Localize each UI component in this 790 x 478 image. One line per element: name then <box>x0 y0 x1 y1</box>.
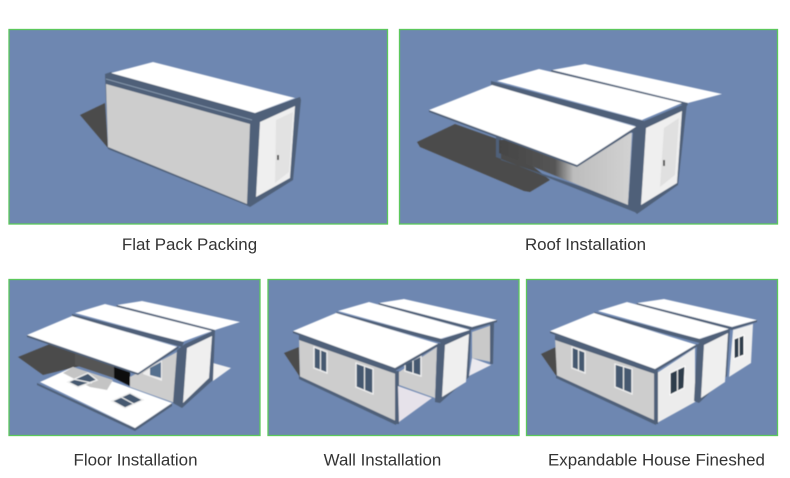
illustration: finished house <box>541 299 757 425</box>
illustration: folded container <box>80 62 301 207</box>
illustration: walls added <box>284 299 497 425</box>
caption: roof installation: Roof Installation <box>525 235 646 254</box>
panel background <box>268 280 519 436</box>
caption: expandable house finished: Expandable House Fineshed <box>548 450 765 470</box>
caption: floor installation: Floor Installation <box>74 450 197 470</box>
caption: flat pack packing: Flat Pack Packing <box>122 235 257 254</box>
panel background <box>526 280 778 436</box>
panel background <box>9 280 260 436</box>
caption: wall installation: Wall Installation <box>324 450 441 470</box>
panel: roof installation <box>400 30 778 224</box>
panel: expandable house finished <box>526 280 778 436</box>
panel background <box>9 30 388 224</box>
panel: flat pack packing <box>9 30 388 224</box>
illustration: floor added <box>18 301 240 431</box>
illustration: roof unfolded <box>417 64 722 214</box>
panel: wall installation <box>268 280 519 436</box>
panel background <box>400 30 778 224</box>
panel: floor installation <box>9 280 260 436</box>
